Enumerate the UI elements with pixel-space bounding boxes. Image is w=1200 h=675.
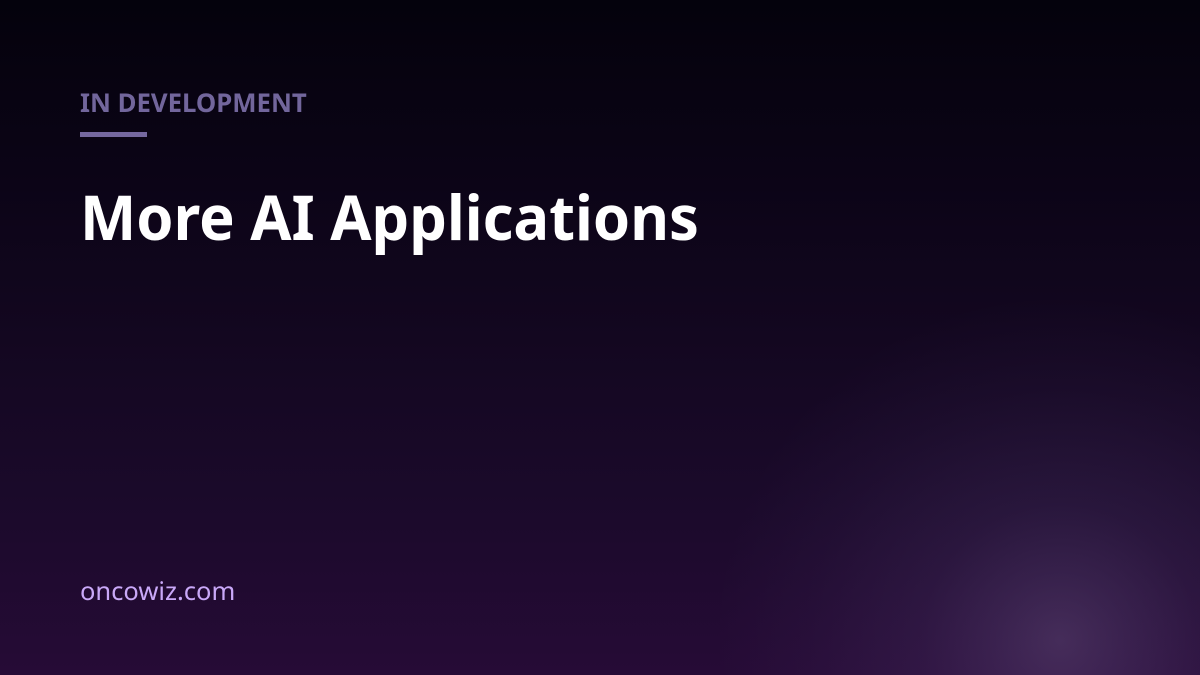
- eyebrow label: IN DEVELOPMENT: [80, 84, 307, 120]
- title: More AI Applications: [80, 175, 699, 259]
- website footer: oncowiz.com: [80, 574, 235, 608]
- accent bar: [80, 132, 147, 137]
